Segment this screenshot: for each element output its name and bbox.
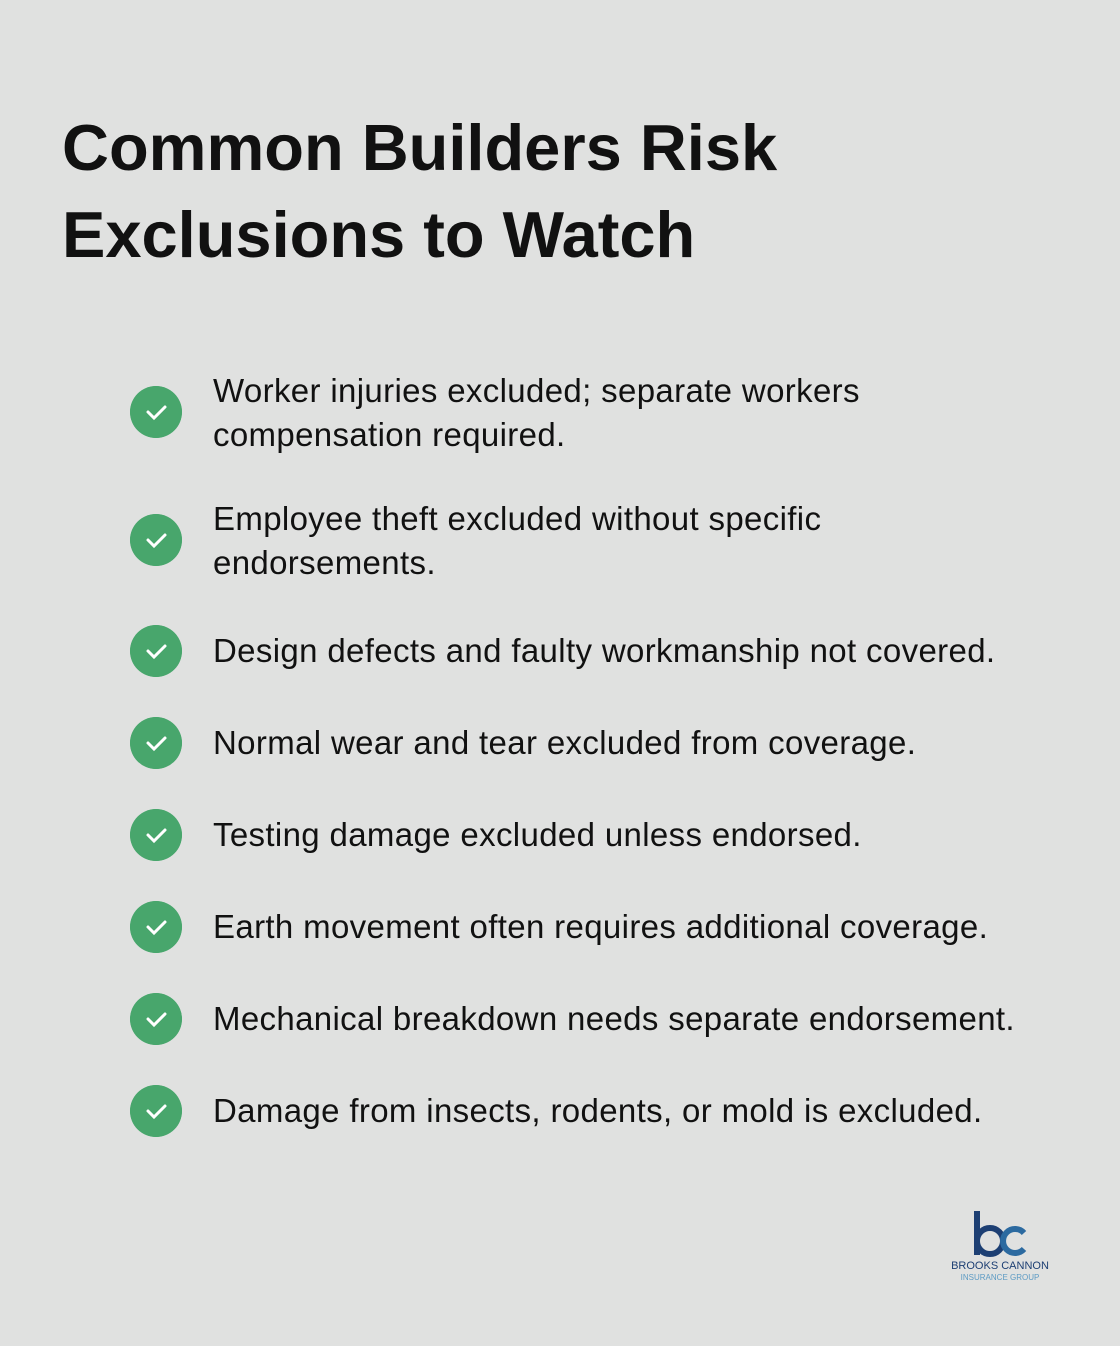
item 2: Employee theft excluded without specific bbox=[213, 500, 821, 537]
title: Common Builders Risk bbox=[62, 111, 777, 184]
item 5: Testing damage excluded unless endorsed. bbox=[213, 816, 862, 853]
item 7 bbox=[130, 993, 1015, 1045]
item 4: Normal wear and tear excluded from coverage. bbox=[213, 724, 916, 761]
icon: check bbox=[130, 514, 182, 566]
item 8: Damage from insects, rodents, or mold is excluded. bbox=[213, 1092, 982, 1129]
item 5 bbox=[130, 809, 862, 861]
item 8 bbox=[130, 1085, 982, 1137]
item 1 bbox=[130, 372, 860, 453]
item 3 bbox=[130, 625, 995, 677]
item 1: compensation required. bbox=[213, 416, 566, 453]
item 3: Design defects and faulty workmanship not covered. bbox=[213, 632, 995, 669]
item 7: Mechanical breakdown needs separate endorsement. bbox=[213, 1000, 1015, 1037]
item 2: endorsements. bbox=[213, 544, 436, 581]
title: Exclusions to Watch bbox=[62, 198, 695, 271]
item 1: Worker injuries excluded; separate workers bbox=[213, 372, 860, 409]
icon: check bbox=[130, 901, 182, 953]
title bbox=[62, 111, 778, 271]
item 6 bbox=[130, 901, 988, 953]
item 2 bbox=[130, 500, 821, 581]
icon: check bbox=[130, 625, 182, 677]
icon: check bbox=[130, 809, 182, 861]
icon: check bbox=[130, 1085, 182, 1137]
logo: INSURANCE GROUP bbox=[961, 1273, 1039, 1282]
icon: check bbox=[130, 717, 182, 769]
logo bbox=[951, 1211, 1049, 1282]
logo: BROOKS CANNON bbox=[951, 1260, 1049, 1272]
icon: check bbox=[130, 993, 182, 1045]
item 4 bbox=[130, 717, 916, 769]
item 6: Earth movement often requires additional coverage. bbox=[213, 908, 988, 945]
icon: check bbox=[130, 386, 182, 438]
